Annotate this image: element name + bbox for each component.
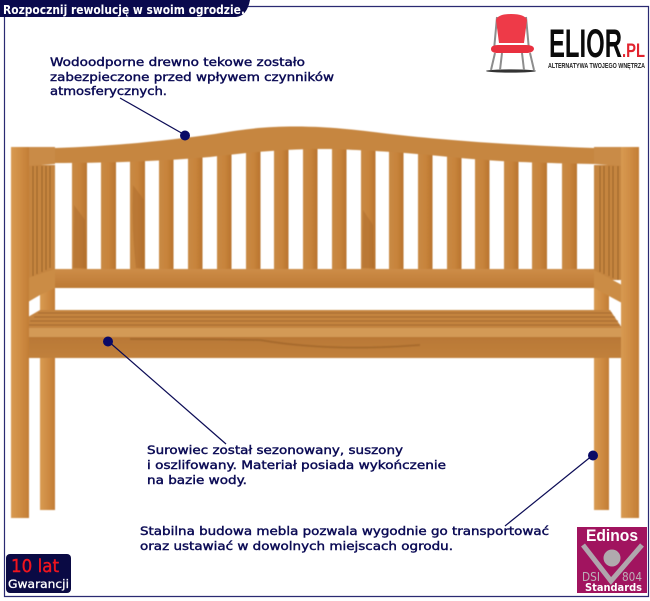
text block: waterproof teak: zabezpieczone przed wpływem czynników: [50, 70, 334, 84]
seat: [27, 310, 622, 328]
text block: seasoned wood: na bazie wody.: [147, 473, 247, 487]
text block: stable build: oraz ustawiać w dowolnych miejscach ogrodu.: [140, 539, 453, 553]
wood grain on slats: [73, 185, 374, 268]
text block: waterproof teak: [50, 55, 334, 98]
text block: waterproof teak: atmosferycznych.: [50, 84, 167, 98]
badge: Edinos DSI 804 Standards: [577, 526, 647, 594]
title banner: Rozpocznij rewolucję w swoim ogrodzie.: [3, 2, 245, 17]
front legs: [11, 147, 29, 518]
icon: red chair: [486, 14, 536, 73]
leader: stable build: [505, 450, 598, 526]
badge: 10 year guarantee: Gwarancji: [8, 577, 69, 591]
seat front edge: [27, 328, 622, 337]
rear legs: [40, 288, 609, 510]
seat slat lines: [28, 313, 620, 325]
text block: seasoned wood: [147, 443, 446, 487]
leader: seasoned wood: [103, 336, 226, 444]
badge: Edinos DSI 804 Standards: Edinos: [586, 526, 638, 545]
badge: 10 year guarantee: [6, 554, 71, 593]
bench: [11, 126, 639, 518]
text block: waterproof teak: Wodoodporne drewno tekowe zostało: [50, 55, 305, 69]
badge: Edinos DSI 804 Standards: 804: [622, 570, 642, 584]
badge: Edinos DSI 804 Standards: DSI: [582, 570, 600, 584]
right side lattice and arm: [594, 147, 622, 303]
badge: Edinos DSI 804 Standards: Standards: [585, 581, 642, 594]
top rail: [55, 126, 594, 164]
text block: stable build: Stabilna budowa mebla pozwala wygodnie go transportować: [140, 524, 549, 538]
logo: Elior: [486, 14, 645, 73]
left side lattice and arm: [27, 147, 55, 302]
lower back rail: [55, 269, 594, 288]
leader: waterproof teak: [120, 98, 190, 140]
text block: seasoned wood: Surowiec został sezonowany, suszony: [147, 443, 403, 457]
text block: stable build: [140, 524, 549, 553]
text block: seasoned wood: i oszlifowany. Materiał posiada wykończenie: [147, 458, 446, 472]
apron: [27, 337, 622, 358]
back slats: [72, 145, 577, 270]
badge: 10 year guarantee: 10 lat: [11, 556, 59, 577]
